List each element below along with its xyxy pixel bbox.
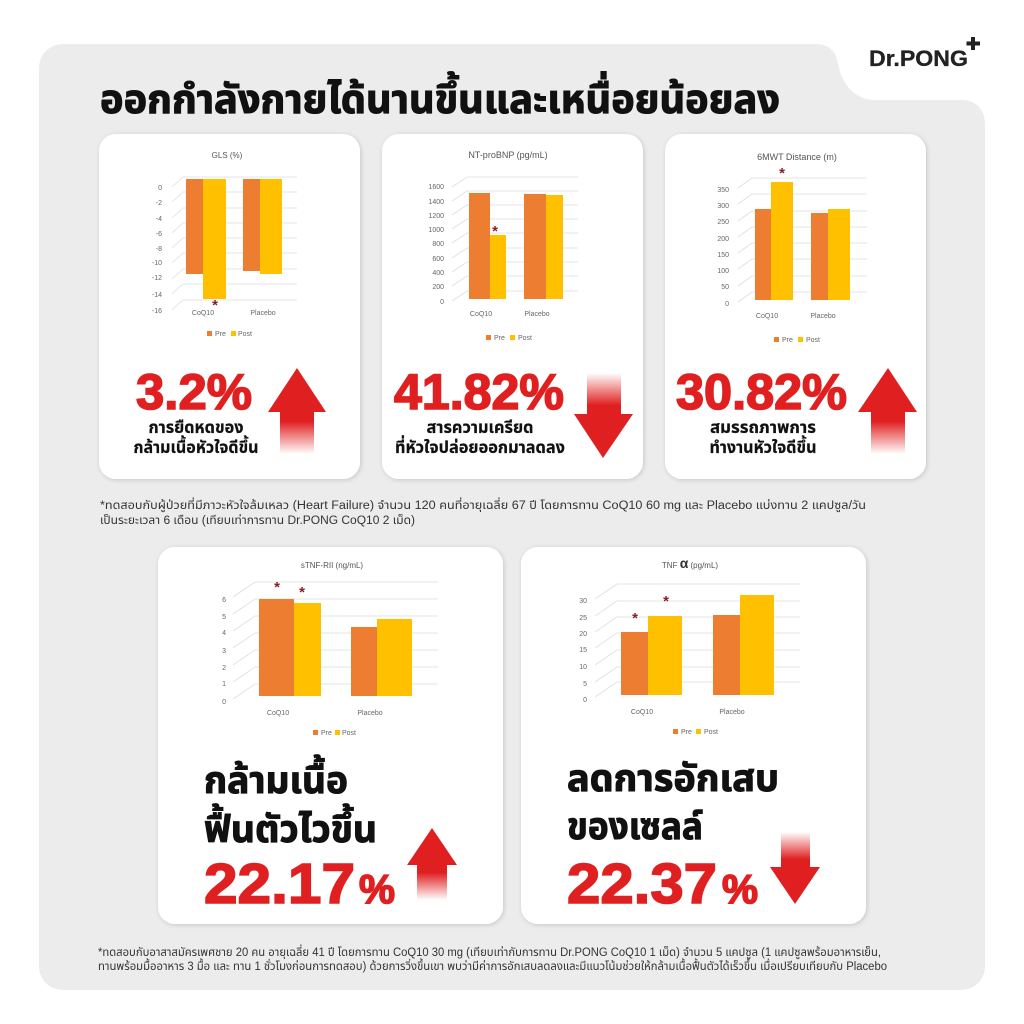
asterisk: * [492, 223, 498, 240]
chart title: 6MWT Distance (m) [757, 152, 837, 162]
heading [204, 754, 377, 850]
chart: NT-proBNP bars [469, 193, 563, 299]
y axis labels: -6 [156, 231, 162, 238]
icon: up arrow [858, 368, 917, 454]
y axis labels: 350 [717, 187, 729, 194]
asterisks: * [632, 610, 638, 627]
description: สารความเครียด [426, 418, 534, 437]
legend: Post [342, 730, 356, 737]
footnote 1: *ทดสอบกับผู้ป่วยที่มีภาวะหัวใจล้มเหลว (Heart Failure) จำนวน 120 คนที่อายุเฉลี่ย 67 ปี โดยการทาน CoQ10 60 mg และ Placebo แบ่งทาน 2 แคปซูล/วัน [100, 497, 866, 512]
asterisks [632, 593, 669, 627]
panel: TNF alpha [521, 547, 866, 924]
chart: 6MWT bars [755, 182, 850, 300]
heading: ฟื้นตัวไวขึ้น [204, 803, 377, 850]
description: การยืดหดของ [148, 418, 244, 437]
chart title: GLS (%) [212, 151, 243, 160]
y axis labels: -2 [156, 200, 162, 207]
description [710, 418, 816, 457]
panel: sTNF-RII [158, 547, 503, 924]
x axis labels [756, 313, 836, 320]
y axis labels: -8 [156, 246, 162, 253]
y axis labels: -14 [152, 292, 162, 299]
heading: ของเซลล์ [567, 806, 703, 847]
stat: 41.82%: 41.82% [394, 364, 564, 420]
footnote 2: *ทดสอบกับอาสาสมัครเพศชาย 20 คน อายุเฉลี่ย 41 ปี โดยการทาน CoQ10 30 mg (เทียบเท่ากับการทาน Dr.PONG CoQ10 1 เม็ด) จำนวน 5 แคปซูล (1 แคปซูลพร้อมอาหารเย็น, [98, 944, 881, 959]
legend: Pre [215, 331, 226, 338]
x axis labels: Placebo [719, 709, 745, 716]
chart: GLS bars [186, 179, 282, 299]
x axis labels: CoQ10 [192, 310, 214, 317]
x axis labels [267, 710, 383, 717]
stat: 22.17%: % [359, 866, 395, 912]
y axis labels: 1000 [428, 227, 444, 234]
y axis labels: 200 [432, 284, 444, 291]
chart title: sTNF-RII (ng/mL) [301, 561, 363, 570]
x axis labels: CoQ10 [756, 313, 778, 320]
y axis labels: 15 [579, 647, 587, 654]
legend: Pre [782, 337, 793, 344]
y axis labels: 1 [222, 681, 226, 688]
y axis labels: 30 [579, 598, 587, 605]
y axis labels: 100 [717, 268, 729, 275]
chart: TNF alpha bars [621, 595, 774, 695]
description: ทำงานหัวใจดีขึ้น [710, 435, 816, 457]
logo: Dr.PONG+ [869, 37, 980, 71]
y axis labels: 6 [222, 597, 226, 604]
legend: Pre [321, 730, 332, 737]
y axis labels: 200 [717, 236, 729, 243]
x axis labels: Placebo [250, 310, 276, 317]
y axis labels: 2 [222, 665, 226, 672]
y axis labels: 0 [725, 301, 729, 308]
legend [313, 730, 356, 737]
x axis labels [192, 310, 276, 317]
stat: 3.2%: 3.2% [136, 364, 252, 420]
y axis labels: -12 [152, 275, 162, 282]
asterisks: * [663, 593, 669, 610]
x axis labels: CoQ10 [470, 311, 492, 318]
description: กล้ามเนื้อหัวใจดีขึ้น [134, 435, 258, 457]
y axis labels [428, 184, 444, 306]
y axis labels [222, 597, 226, 706]
stat: 22.37%: % [722, 866, 758, 912]
stat: 30.82%: 30.82% [676, 364, 847, 420]
y axis labels: 300 [717, 203, 729, 210]
x axis labels: CoQ10 [631, 709, 653, 716]
icon: up arrow [407, 828, 457, 900]
x axis labels: Placebo [357, 710, 383, 717]
chart title: NT-proBNP (pg/mL) [468, 150, 548, 160]
asterisks: * [274, 579, 280, 596]
panel: GLS [99, 134, 360, 479]
panel: 6MWT [665, 134, 926, 479]
x axis labels: CoQ10 [267, 710, 289, 717]
chart title: TNF α (pg/mL) [662, 555, 718, 571]
y axis labels: 600 [432, 256, 444, 263]
legend: Post [806, 337, 820, 344]
asterisk: * [212, 297, 218, 314]
footnote 1: เป็นระยะเวลา 6 เดือน (เทียบเท่าการทาน Dr.PONG CoQ10 2 เม็ด) [100, 513, 415, 527]
asterisk: * [779, 165, 785, 182]
y axis labels [579, 598, 587, 704]
logo: Dr.PONG+: Dr.PONG [869, 46, 968, 71]
title: ออกกำลังกายได้นานขึ้นและเหนื่อยน้อยลง [100, 71, 780, 122]
y axis labels: -4 [156, 216, 162, 223]
y axis labels [717, 187, 729, 308]
footnote 2: ทานพร้อมมื้ออาหาร 3 มื้อ และ ทาน 1 ชั่วโมงก่อนการทดสอบ) ด้วยการวิ่งขึ้นเขา พบว่ามีค่าการอักเสบลดลงและมีแนวโน้มช่วยให้กล้ามเนื้อฟื้นตัวได้เร็วขึ้น เมื่อเปรียบเทียบกับ Placebo [98, 958, 887, 973]
description [395, 418, 565, 457]
legend: Post [704, 729, 718, 736]
footnote 1 [100, 497, 866, 527]
legend [486, 335, 532, 342]
legend: Pre [494, 335, 505, 342]
legend: Pre [681, 729, 692, 736]
description [134, 418, 258, 457]
y axis labels: 50 [721, 284, 729, 291]
x axis labels: Placebo [810, 313, 836, 320]
heading [567, 758, 779, 847]
chart: sTNF-RII bars [259, 599, 412, 696]
y axis labels: 400 [432, 270, 444, 277]
icon: down arrow [770, 832, 820, 904]
y axis labels: 0 [583, 697, 587, 704]
heading: กล้ามเนื้อ [204, 754, 348, 801]
stat: 22.37%: 22.37 [567, 852, 717, 916]
y axis labels: 0 [158, 185, 162, 192]
footnote 2 [98, 944, 887, 973]
y axis labels: 0 [222, 699, 226, 706]
y axis labels [152, 185, 162, 315]
y axis labels: 5 [583, 681, 587, 688]
legend: Post [238, 331, 252, 338]
legend [207, 331, 252, 338]
y axis labels: 4 [222, 630, 226, 637]
icon: up arrow [268, 368, 326, 454]
description: ที่หัวใจปล่อยออกมาลดลง [395, 435, 565, 457]
y axis labels: 1200 [428, 213, 444, 220]
description: สมรรถภาพการ [710, 418, 816, 437]
y axis labels: 20 [579, 631, 587, 638]
x axis labels: Placebo [524, 311, 550, 318]
y axis labels: 5 [222, 614, 226, 621]
y axis labels: -16 [152, 308, 162, 315]
y axis labels: 0 [440, 299, 444, 306]
asterisks [274, 579, 305, 601]
icon: down arrow [574, 373, 633, 458]
legend [673, 729, 718, 736]
y axis labels: 800 [432, 241, 444, 248]
heading: ลดการอักเสบ [567, 758, 779, 799]
y axis labels: 1600 [428, 184, 444, 191]
y axis labels: 250 [717, 219, 729, 226]
y axis labels: 3 [222, 648, 226, 655]
legend [774, 337, 820, 344]
legend: Post [518, 335, 532, 342]
asterisks: * [299, 584, 305, 601]
x axis labels [631, 709, 745, 716]
stat: 22.17%: 22.17 [204, 852, 355, 916]
y axis labels: 150 [717, 252, 729, 259]
y axis labels: -10 [152, 260, 162, 267]
y axis labels: 1400 [428, 199, 444, 206]
panel: NT-proBNP [382, 134, 643, 479]
y axis labels: 10 [579, 664, 587, 671]
y axis labels: 25 [579, 615, 587, 622]
x axis labels [470, 311, 550, 318]
